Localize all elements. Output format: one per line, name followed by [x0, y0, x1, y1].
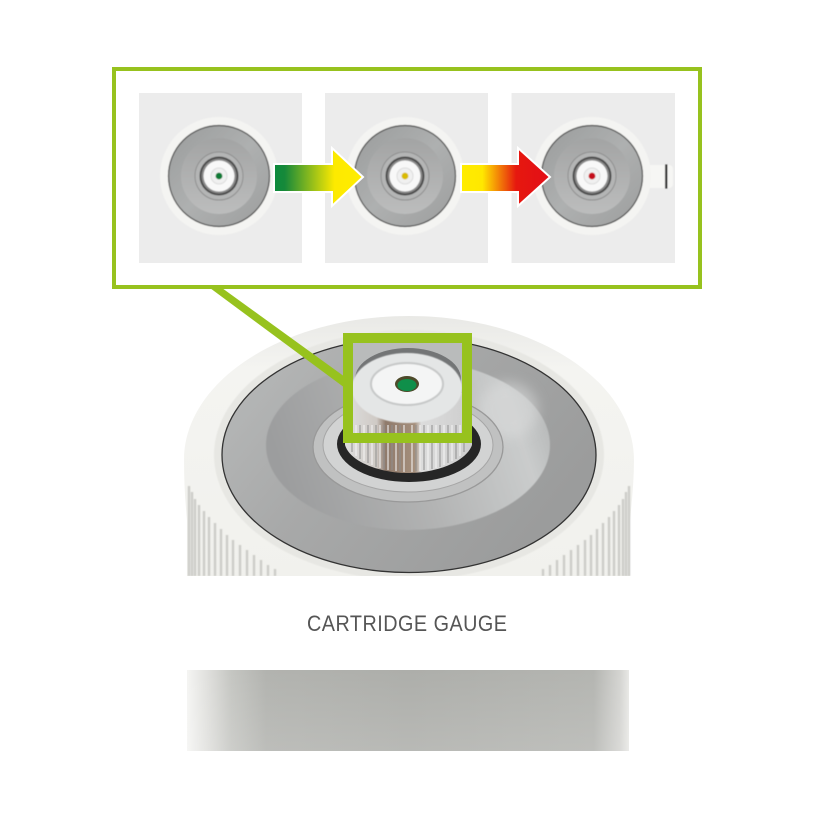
rim inner band: [214, 330, 604, 580]
raised inner disc: [266, 360, 550, 530]
metal top plate: [222, 338, 596, 572]
clear collar: [313, 392, 503, 502]
arrow: green to yellow: [274, 148, 363, 206]
caption: CARTRIDGE GAUGE: [307, 612, 507, 636]
icon: gauge top view, red: [533, 117, 651, 235]
gauge knob: [345, 343, 472, 473]
gauge highlight square: [348, 338, 467, 438]
icon: gauge top view, green: [160, 117, 278, 235]
infographic canvas: [112, 67, 702, 751]
disc highlight: [478, 382, 538, 438]
leader line: [210, 288, 345, 388]
grip ribs: [189, 486, 629, 576]
icon: gauge top view, yellow: [346, 117, 464, 235]
knob top: [352, 353, 462, 423]
gauge indicator dot: [395, 376, 419, 392]
arrow: yellow to red: [461, 148, 550, 206]
cartridge product: [184, 316, 634, 580]
panel: green gauge state: [139, 93, 302, 263]
callout frame: [114, 69, 700, 287]
knob window backdrop: [353, 343, 462, 393]
panel: red gauge state: [512, 93, 675, 263]
cartridge base band: [187, 670, 629, 751]
icon: cartridge port: [645, 164, 673, 188]
panel: yellow gauge state: [325, 93, 488, 263]
cartridge rim: [184, 316, 634, 580]
